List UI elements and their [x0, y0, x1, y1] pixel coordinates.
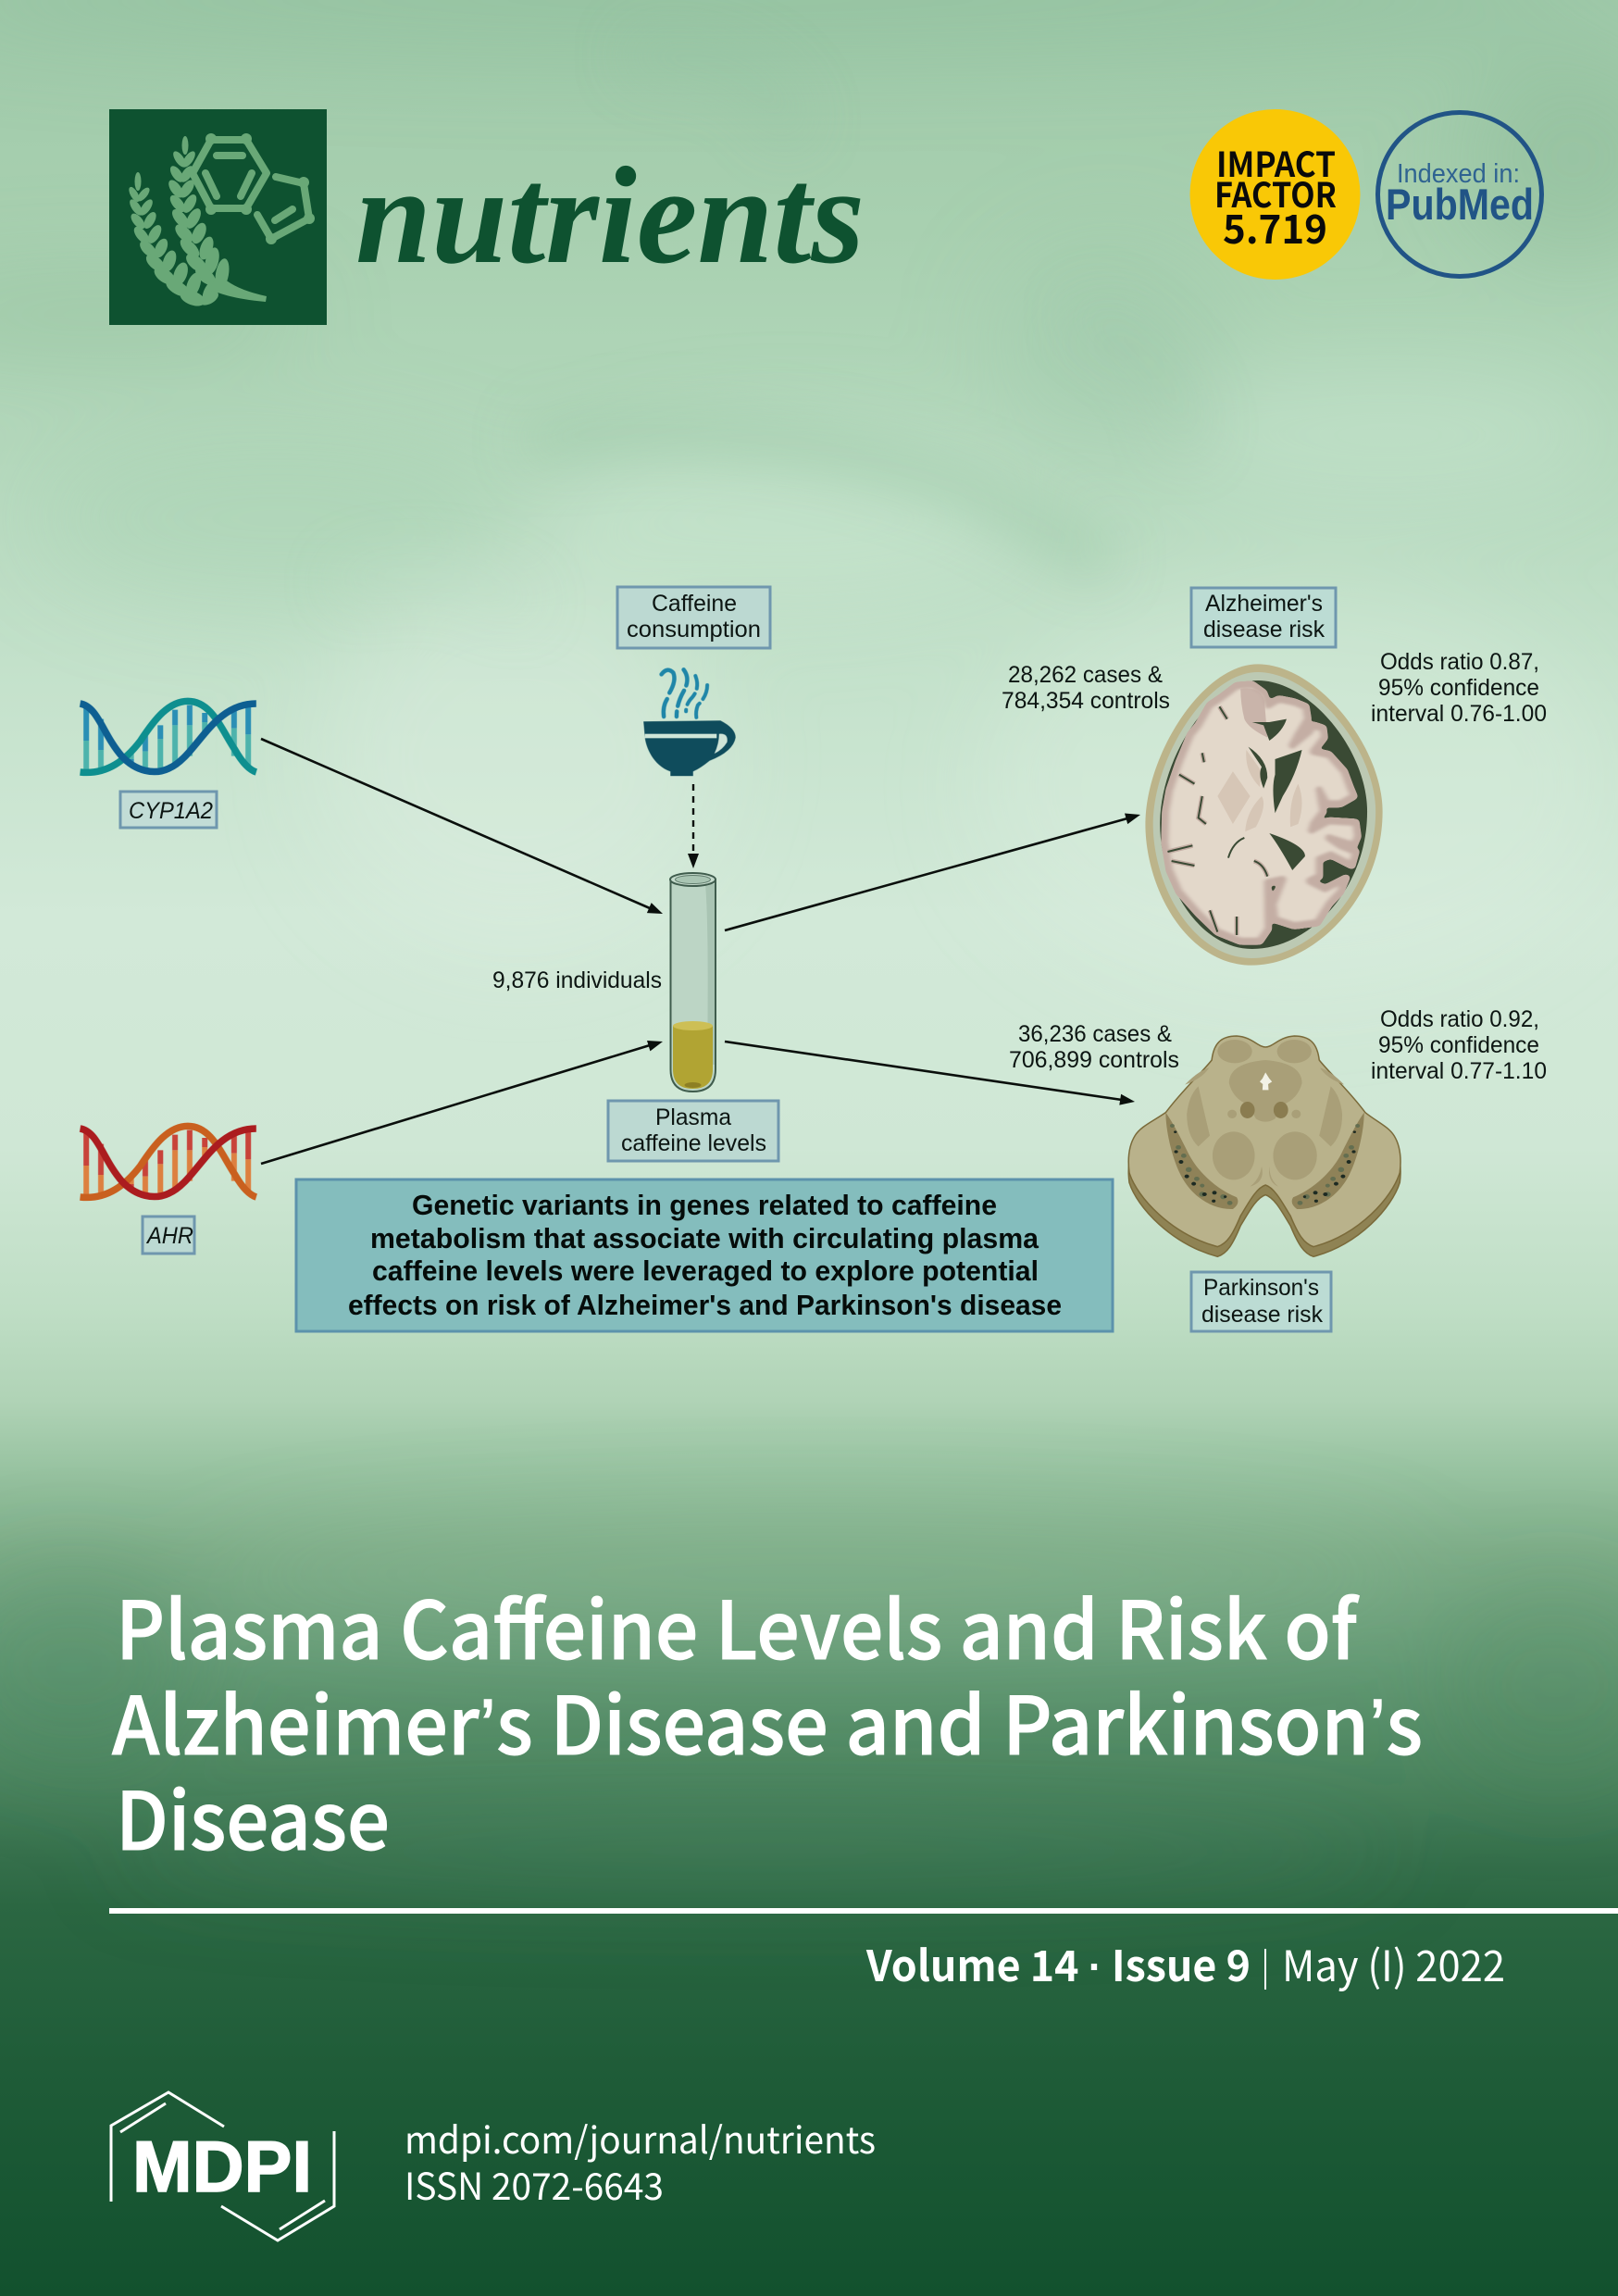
text: Parkinson's odds ratio: Odds ratio 0.92,	[1380, 1006, 1539, 1032]
label: Alzheimer's disease risk: Alzheimer's	[1205, 591, 1323, 617]
label: caffeine consumption: consumption	[627, 617, 761, 643]
badge: impact factor	[1190, 109, 1361, 280]
label: plasma caffeine levels	[608, 1101, 778, 1161]
label: Alzheimer's disease risk: disease risk	[1203, 617, 1325, 643]
substantia nigra left	[1165, 1113, 1238, 1209]
badge: indexed in PubMed: Indexed in:	[1397, 159, 1520, 189]
icon: steaming coffee cup	[643, 669, 736, 776]
journal logo: green square with molecule and wheat	[109, 109, 327, 325]
text: Alzheimer's odds ratio: Odds ratio 0.87,	[1380, 649, 1539, 675]
label: CYP1A2	[120, 792, 217, 828]
arrow: plasma to Parkinson's	[725, 1042, 1135, 1105]
callout: summary box: Genetic variants in genes related to caffeine	[412, 1189, 997, 1221]
wheat icon	[127, 136, 267, 309]
MDPI logo	[111, 2092, 334, 2240]
issue line	[865, 1933, 1505, 1994]
journal URL and ISSN	[404, 2111, 876, 2211]
label: Parkinson's disease risk: Parkinson's	[1203, 1275, 1319, 1301]
aqueduct	[1260, 1072, 1272, 1090]
text: Alzheimer's odds ratio: 95% confidence	[1378, 675, 1539, 701]
issue line: May (I) 2022	[1282, 1933, 1505, 1994]
callout: summary box: metabolism that associate with circulating plasma	[370, 1222, 1039, 1254]
substantia nigra right	[1292, 1113, 1364, 1209]
callout: summary box: caffeine levels were leveraged to explore potential	[372, 1254, 1039, 1287]
icon: CYP1A2 DNA helix	[81, 701, 256, 772]
callout: summary box: effects on risk of Alzheimer's and Parkinson's disease	[348, 1289, 1062, 1321]
text: Parkinson's sample size: 36,236 cases &	[1018, 1021, 1172, 1047]
badge: indexed in PubMed: PubMed	[1386, 180, 1534, 229]
arrow: caffeine to plasma dashed	[688, 784, 699, 868]
brain tissue	[1165, 684, 1358, 942]
icon: midbrain cross-section	[1128, 1036, 1400, 1256]
molecule icon	[193, 133, 315, 244]
text: Alzheimer's sample size	[1002, 662, 1170, 714]
arrow: CYP1A2 to plasma	[261, 739, 663, 914]
badge: indexed in PubMed	[1377, 113, 1542, 276]
label: Parkinson's disease risk	[1191, 1272, 1331, 1331]
colliculi and tegmentum	[1185, 1040, 1344, 1187]
label: AHR: AHR	[145, 1223, 193, 1249]
label: plasma caffeine levels: caffeine levels	[621, 1130, 766, 1156]
icon: brain cross-section	[1145, 664, 1383, 966]
issue line: Volume 14 · Issue 9	[865, 1933, 1251, 1994]
arrow: AHR to plasma	[261, 1041, 663, 1164]
text: Alzheimer's odds ratio: interval 0.76-1.00	[1371, 701, 1547, 727]
journal URL and ISSN: ISSN 2072-6643	[404, 2157, 664, 2211]
text: 9,876 individuals: 9,876 individuals	[492, 967, 662, 993]
icon: test tube with plasma	[670, 873, 716, 1092]
icon: AHR DNA helix	[81, 1126, 256, 1197]
journal title: nutrients: nutrients	[355, 139, 865, 293]
callout: summary box	[296, 1179, 1113, 1331]
text: Parkinson's odds ratio	[1371, 1006, 1547, 1084]
badge: impact factor: 5.719	[1223, 198, 1327, 256]
badge: impact factor: IMPACT	[1216, 137, 1336, 187]
label: caffeine consumption	[617, 587, 770, 648]
text: Parkinson's sample size	[1009, 1021, 1179, 1073]
text: Alzheimer's sample size: 784,354 controls	[1002, 688, 1170, 714]
main heading: Plasma Caffeine Levels and Risk of	[116, 1566, 1360, 1682]
text: Alzheimer's sample size: 28,262 cases &	[1008, 662, 1163, 688]
heading rule	[109, 1908, 1618, 1914]
journal URL and ISSN: mdpi.com/journal/nutrients	[404, 2111, 876, 2165]
text: Parkinson's odds ratio: interval 0.77-1.10	[1371, 1058, 1547, 1084]
text: Parkinson's odds ratio: 95% confidence	[1378, 1032, 1539, 1058]
label: AHR	[143, 1217, 194, 1254]
liquid	[673, 1026, 713, 1089]
label: CYP1A2: CYP1A2	[129, 798, 213, 824]
deep nuclei	[1217, 750, 1302, 831]
label: Alzheimer's disease risk	[1191, 588, 1336, 647]
main heading: Disease	[116, 1757, 390, 1873]
enlarged ventricles and sulci	[1249, 719, 1305, 870]
MDPI logo: MDPI	[132, 2126, 312, 2207]
badge: impact factor: FACTOR	[1214, 168, 1337, 218]
label: caffeine consumption: Caffeine	[652, 591, 737, 617]
arrow: plasma to Alzheimer's	[725, 813, 1140, 930]
text: Parkinson's sample size: 706,899 controls	[1009, 1047, 1179, 1073]
label: Parkinson's disease risk: disease risk	[1201, 1302, 1323, 1328]
label: plasma caffeine levels: Plasma	[655, 1104, 731, 1130]
main heading	[112, 1566, 1423, 1873]
main heading: Alzheimer’s Disease and Parkinson’s	[112, 1662, 1423, 1778]
text: Alzheimer's odds ratio	[1371, 649, 1547, 727]
